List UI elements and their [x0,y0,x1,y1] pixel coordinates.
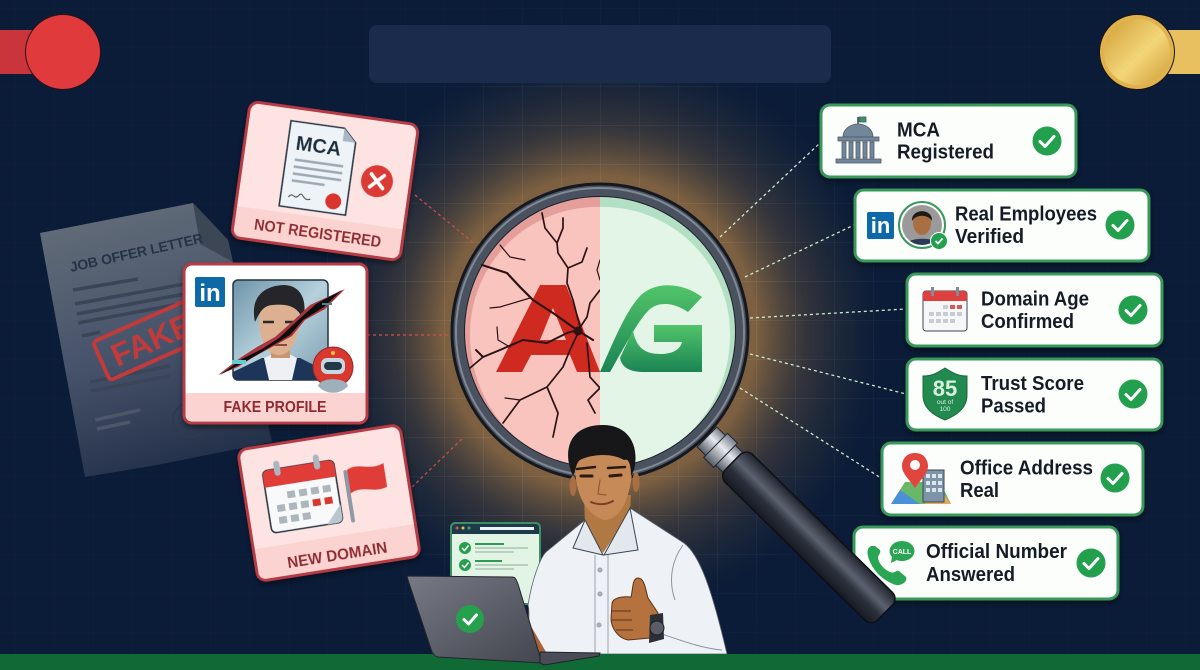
label: official number answered: Answered [926,564,1015,586]
label: domain age confirmed: Confirmed [981,311,1074,333]
panel: domain age confirmed [907,274,1162,346]
icon: phone with call bubble [868,541,914,585]
icon: government building [836,117,881,163]
icon: trust score shield [923,368,967,420]
faded fake job offer letter [40,203,272,477]
label: real employees verified: Real Employees [955,204,1097,226]
icon: green check [1118,380,1148,408]
icon: LinkedIn: in [871,213,890,238]
icon: robot badge [313,347,353,393]
label: trust score passed: Trust Score [981,373,1084,395]
lens glass halves [460,190,740,475]
icon: green check [1118,296,1148,324]
label: not registered: NOT REGISTERED [253,217,382,251]
magnifying glass lens [452,184,748,480]
label: official number answered [926,541,1067,586]
icon: calendar [261,452,343,533]
letter heading: JOB OFFER LETTER [68,230,204,275]
central glow [300,40,900,640]
icon: LinkedIn [195,277,225,307]
label: new domain: NEW DOMAIN [286,540,389,572]
label: office address real: Office Address [960,458,1093,480]
icon: red cross [359,163,395,199]
icon: MCA document [279,121,357,215]
label: trust score passed [981,373,1084,418]
icon: trust score shield: 100 [940,406,951,413]
label: fake profile: FAKE PROFILE [224,399,327,416]
faint seal [173,403,207,437]
icon: LinkedIn [867,212,894,239]
label: office address real [960,458,1093,502]
label: office address real: Real [960,480,999,502]
rim [452,184,748,480]
label: domain age confirmed [981,288,1089,333]
panel: official number answered [854,527,1118,599]
AG logo letter G [600,285,702,372]
label: real employees verified [955,204,1097,248]
sleeve crease [656,545,722,650]
person giving thumbs up [527,425,727,654]
green footer bar [0,654,1200,670]
FAKE stamp [93,291,224,380]
icon: green check [1106,210,1134,240]
label: MCA registered [897,120,994,164]
label: domain age confirmed: Domain Age [981,288,1089,310]
icon: MCA document: MCA [294,133,343,161]
panel: office address real [882,443,1143,515]
icon: LinkedIn: in [199,280,221,307]
neck [584,495,631,553]
icon: phone with call bubble: CALL [893,549,912,556]
cracks on left half [470,213,600,437]
background grid [306,14,912,613]
icon: map pin and office [891,453,951,504]
laptop check badge [456,605,484,633]
icon: green check [1076,548,1106,578]
panel: MCA not registered [231,101,419,261]
shirt placket and buttons [595,555,608,654]
magnifying glass handle [693,423,899,626]
panel: new domain [238,424,420,582]
label: real employees verified: Verified [955,226,1024,248]
wristwatch [649,613,664,643]
laptop [407,576,600,665]
letter text lines [73,279,190,429]
icon: trust score shield: out of [937,399,953,406]
icon: trust score shield: 85 [933,376,957,401]
hair [568,425,636,476]
label: MCA registered: Registered [897,142,994,164]
icon: red flag [343,462,392,523]
right gold marker [1099,14,1200,90]
label: official number answered: Official Number [926,541,1067,563]
panel: fake profile [184,264,367,423]
face details [577,467,625,504]
head [575,448,633,520]
label: trust score passed: Passed [981,396,1046,418]
icon: green check [1100,464,1130,492]
red connector lines [367,195,475,487]
panel: trust score passed [907,359,1162,430]
panel: MCA registered [821,105,1076,177]
jagged slash across photo [218,289,345,375]
panel: real employees verified [855,190,1149,261]
fake profile photo [233,280,328,380]
icon: calendar [923,287,967,331]
label: MCA registered: MCA [897,120,940,142]
icon: green check [1032,126,1062,156]
blank title banner [369,25,831,83]
left red marker [0,14,101,90]
collar [573,508,638,555]
FAKE stamp: FAKE [105,306,198,374]
thumbs up hand [611,578,658,640]
browser checklist window [451,523,540,604]
AG logo letter A [496,285,600,372]
green connector lines [720,143,906,478]
other hand [527,628,546,652]
icon: employee avatar [899,202,948,250]
shirt [528,508,727,654]
